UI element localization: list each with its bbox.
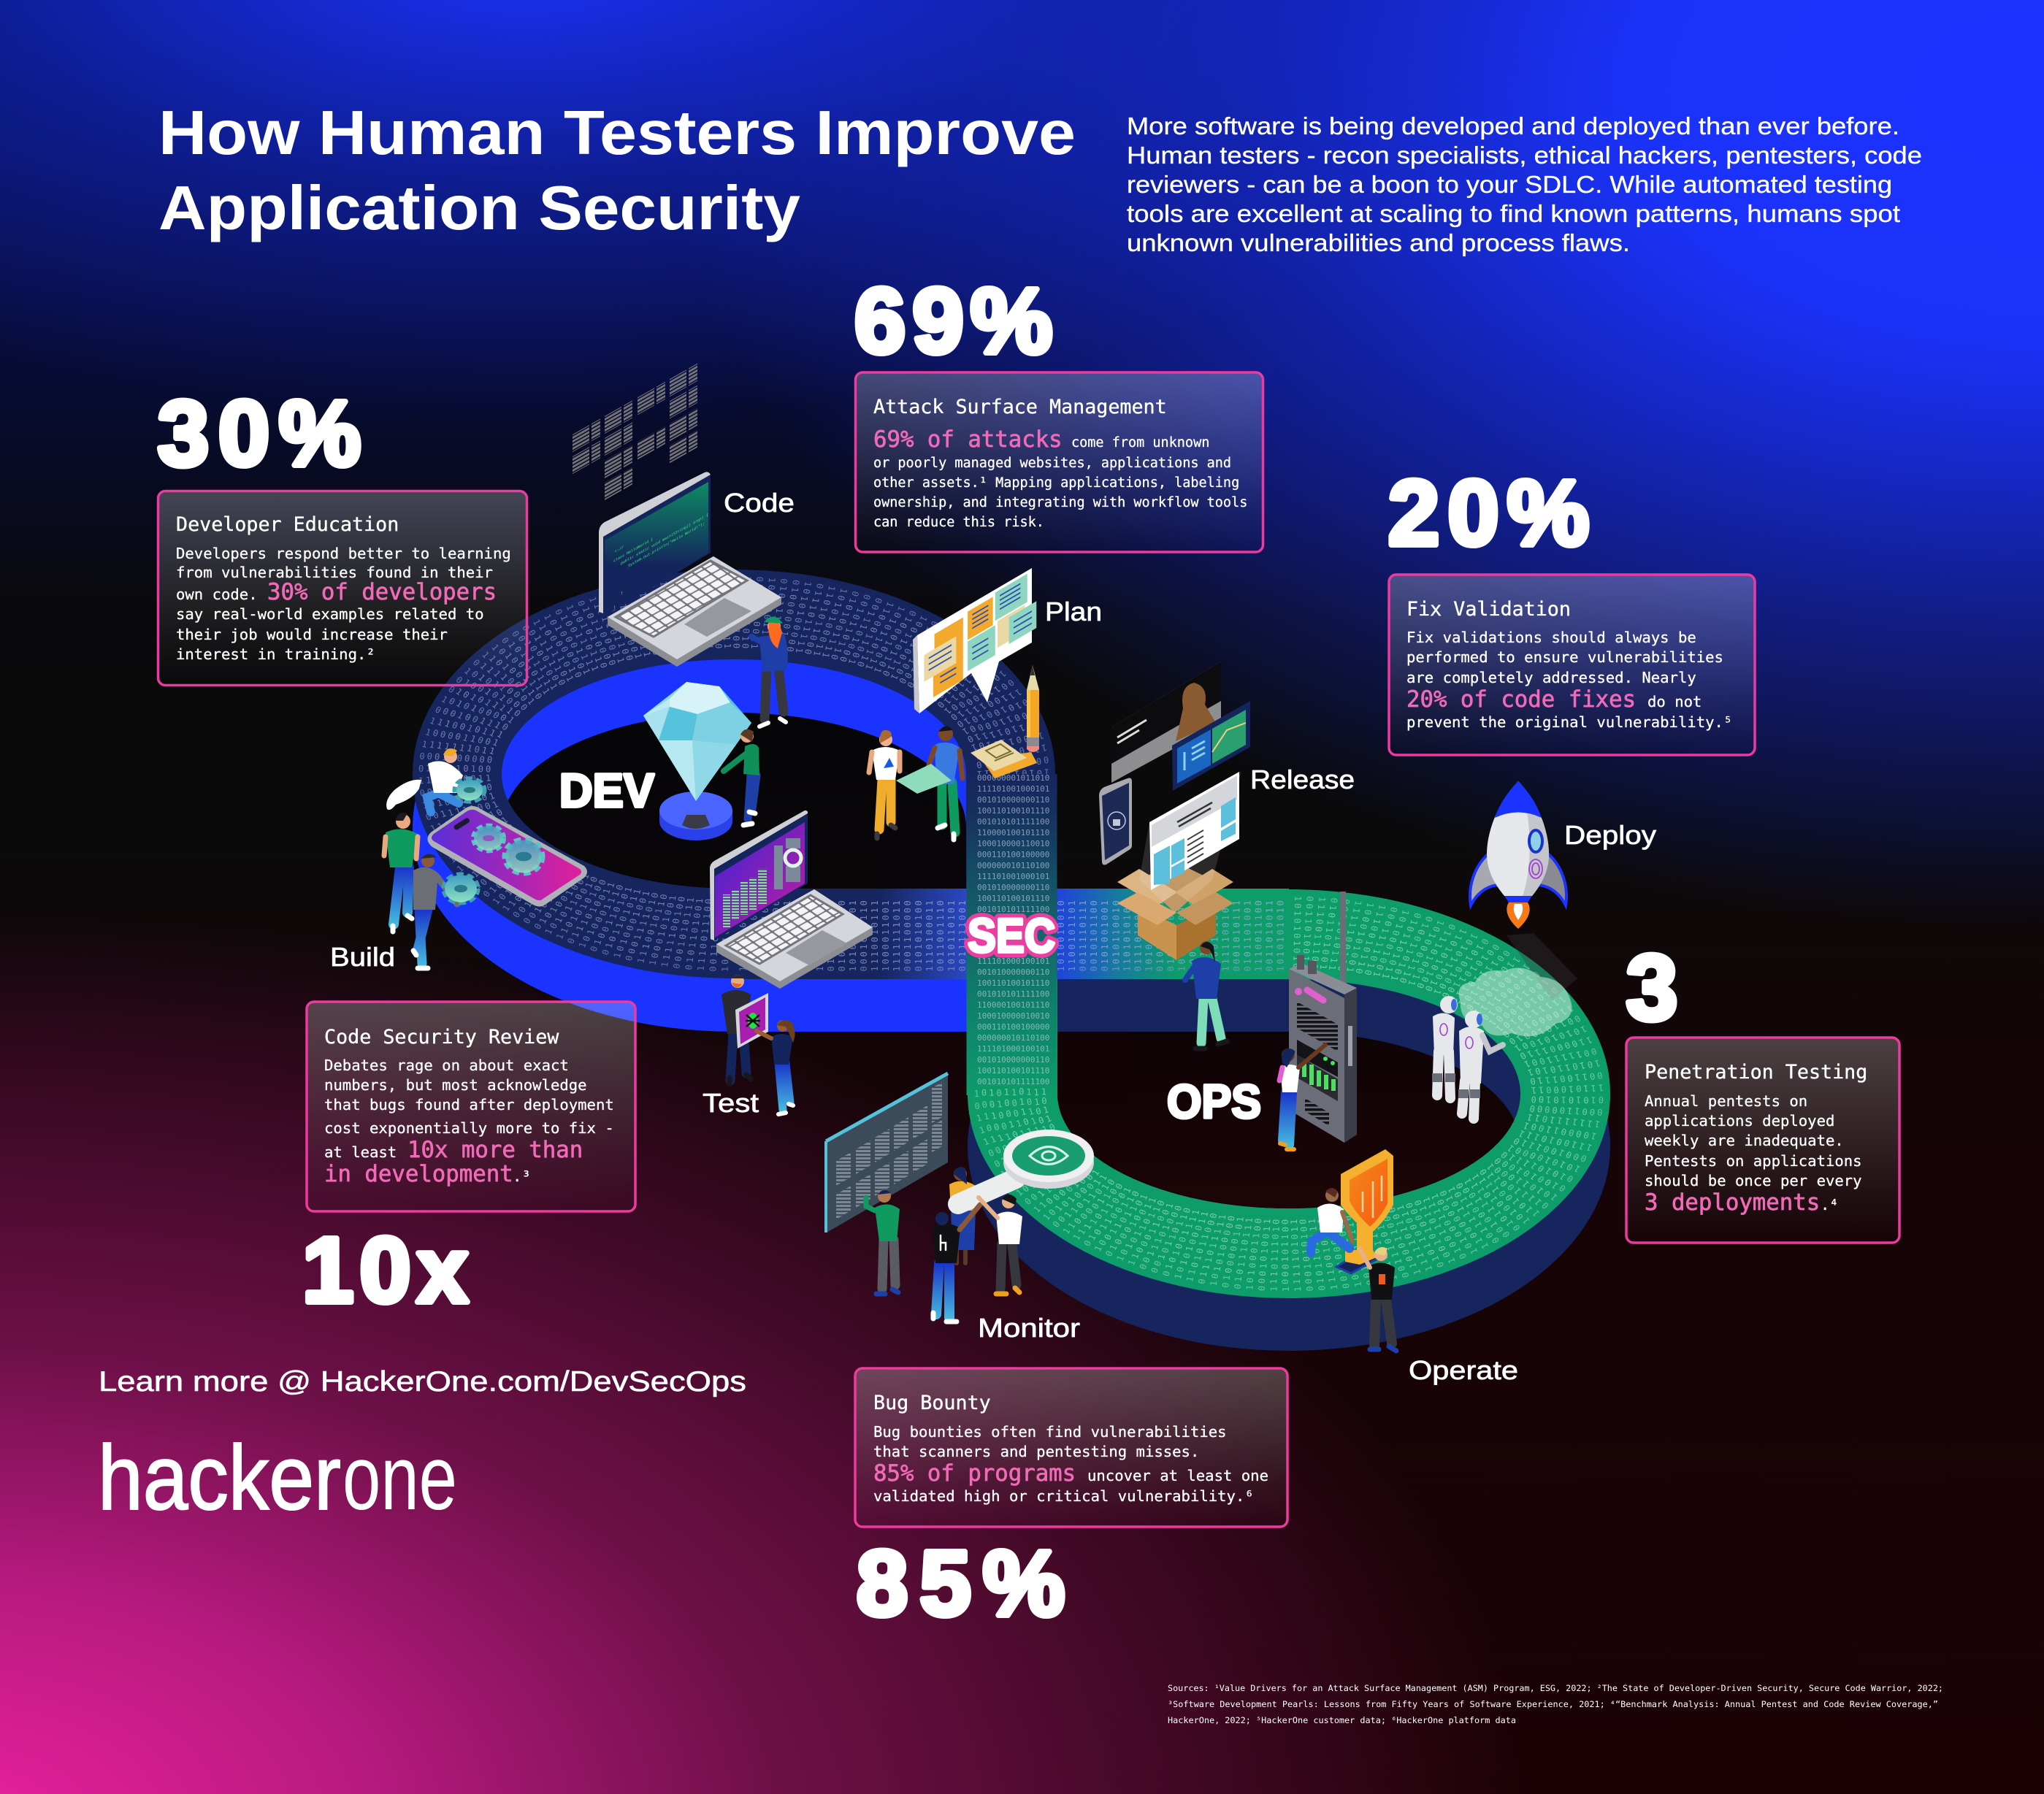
panel: developer education: 30% of developers bbox=[267, 580, 497, 605]
stat: 3: 3 bbox=[1626, 936, 1677, 1039]
figure-eight DevSecOps loop: 11100101010011010110100010110111100101010011010110 bbox=[838, 952, 1284, 957]
panel: penetration testing bbox=[1626, 1038, 1899, 1243]
figure-eight DevSecOps loop: 001010000000110 bbox=[977, 883, 1049, 892]
panel: developer education: Developer Education bbox=[176, 513, 399, 536]
icon: plan board bbox=[913, 568, 1036, 713]
label: Build: Build bbox=[330, 942, 395, 972]
icon: code laptop: class HelloWorld { bbox=[613, 537, 653, 564]
icon: phone with gears bbox=[427, 806, 587, 907]
panel: bug bounty: 85% of programs bbox=[873, 1461, 1076, 1487]
logo: hackerone: one bbox=[342, 1427, 457, 1529]
title bbox=[158, 99, 1076, 243]
figure-eight DevSecOps loop: 0110100110010111001010011010011001011100101001101001100101110010100110100110010111001010011010011001 bbox=[457, 615, 1010, 935]
intro paragraph: unknown vulnerabilities and process flaws. bbox=[1127, 229, 1630, 256]
icon: rocket bbox=[1470, 781, 1577, 1000]
panel: code security review: that bugs found after deployment bbox=[324, 1096, 614, 1113]
sources footnote bbox=[1168, 1683, 1943, 1725]
panel: code security review: in development bbox=[324, 1162, 513, 1187]
person: coder with green cap bbox=[751, 616, 788, 727]
logo: hackerone: hacker bbox=[98, 1427, 341, 1529]
person: operator at server bbox=[1279, 1045, 1325, 1149]
figure-eight DevSecOps loop: 1100100110101101001011100110100110010110100111001011010010110011010110100101110011010011001011010011 bbox=[479, 636, 989, 911]
person: astronaut two bbox=[1459, 1011, 1503, 1119]
icon: test laptop bbox=[710, 810, 873, 989]
panel: penetration testing: .⁴ bbox=[1821, 1196, 1839, 1214]
panel: bug bounty: that scanners and pentesting misses. bbox=[873, 1443, 1199, 1460]
figure-eight DevSecOps loop: 001010101111100 bbox=[977, 817, 1049, 827]
figure-eight DevSecOps loop: 0010110100011010011101001100101101000110100111010011001011010001101001110100110010110100011010011101 bbox=[1026, 948, 1552, 1240]
figure-eight DevSecOps loop: 1010011101001011000110101101101010011101001011000110101101101010011101001011000110101101101010011101 bbox=[419, 577, 1049, 971]
panel: fix validation: Fix Validation bbox=[1406, 598, 1571, 621]
icon: code laptop: } bbox=[621, 591, 623, 596]
icon: exhaust cloud bbox=[1459, 968, 1572, 1036]
icon: release video panel bbox=[1111, 662, 1221, 783]
figure-eight DevSecOps loop: 100110100101110 bbox=[977, 1066, 1049, 1076]
person: builder in grey hoodie bbox=[413, 854, 457, 968]
person: engineer at gem bbox=[724, 729, 759, 825]
panel: penetration testing: 3 deployments bbox=[1645, 1190, 1820, 1216]
figure-eight DevSecOps loop: 000000001011010 bbox=[977, 773, 1049, 783]
figure-eight DevSecOps loop: 0101110010100110101000111010010101110010100110101000111010010101110010100110101000111010010101110010 bbox=[996, 918, 1582, 1270]
person: astronaut one bbox=[1433, 996, 1458, 1098]
figure-eight DevSecOps loop: 100010000110010 bbox=[977, 839, 1049, 848]
panel: developer education: interest in training.² bbox=[176, 645, 375, 663]
figure-eight DevSecOps loop: 0010110100011010011101001100101101000110100111010011001011010001101001110100110010110100011010011101 bbox=[472, 629, 990, 919]
figure-eight DevSecOps loop: 01011100101001101010001110100101011100101001101010 bbox=[850, 945, 1284, 949]
panel: bug bounty: validated high or critical vulnerability.⁶ bbox=[873, 1487, 1254, 1505]
panel: fix validation: 20% of code fixes bbox=[1406, 687, 1636, 713]
label: Test: Test bbox=[703, 1088, 759, 1118]
title: How Human Testers Improve bbox=[158, 99, 1076, 168]
icon: open cardboard box bbox=[1117, 862, 1233, 960]
person: tester with beard bbox=[721, 975, 751, 1084]
person: builder kneeling bbox=[427, 748, 463, 812]
panel: fix validation: prevent the original vulnerability.⁵ bbox=[1406, 713, 1732, 731]
panel: attack surface management: can reduce this risk. bbox=[873, 515, 1044, 530]
panel: attack surface management: or poorly managed websites, applications and bbox=[873, 456, 1231, 471]
figure-eight DevSecOps loop: 11001001101011010010111001101001100101101001110010 bbox=[762, 908, 1284, 913]
panel: code security review: numbers, but most acknowledge bbox=[324, 1076, 587, 1094]
panel: fix validation bbox=[1389, 575, 1755, 755]
figure-eight DevSecOps loop: 100110100101110 bbox=[977, 806, 1049, 816]
figure-eight DevSecOps loop: 00101101000110100111010011001011010001101001110100 bbox=[751, 916, 1284, 920]
figure-eight DevSecOps loop: 1010011101001011000110101101101010011101001011000110101101101010011101001011000110101101101010011101 bbox=[974, 896, 1604, 1292]
sources footnote: HackerOne, 2022; ⁵HackerOne customer data; ⁶HackerOne platform data bbox=[1168, 1715, 1516, 1725]
stat: 20%: 20% bbox=[1388, 461, 1589, 564]
person: monitor analyst in white shirt bbox=[979, 1195, 1022, 1294]
panel: penetration testing: Pentests on applications bbox=[1645, 1152, 1862, 1170]
figure-eight DevSecOps loop: 100110100101110 bbox=[977, 978, 1049, 988]
figure-eight DevSecOps loop: 001010101111100 bbox=[977, 989, 1049, 999]
icon: code laptop: public static void main(String[] args) { bbox=[621, 513, 708, 566]
figure-eight DevSecOps loop: 0101101001110100101101011001011010011101001011010110010110100111010010110101100101101001110100101101 bbox=[486, 644, 981, 904]
icon: gear carried bbox=[445, 875, 477, 902]
figure-eight DevSecOps loop: 1110010101001101011010001011011110010101001101011010001011011110010101001101011010001011011110010101 bbox=[989, 911, 1589, 1277]
icon: website panel bbox=[1149, 772, 1239, 890]
figure-eight DevSecOps loop: 1011001011101000110101100101110100011010110010111010001101011001011101000110101100101110100011010110 bbox=[1019, 940, 1559, 1247]
floating code blocks bbox=[573, 364, 697, 518]
figure-eight DevSecOps loop: 1100100110101101001011100110100110010110100111001011010010110011010110100101110011010011001011010011 bbox=[1033, 956, 1545, 1232]
panel: attack surface management: come from unknown bbox=[1071, 435, 1209, 451]
stat: 85%: 85% bbox=[857, 1532, 1065, 1635]
heading: DEV: DEV bbox=[559, 764, 654, 817]
figure-eight DevSecOps loop: 110000100101110 bbox=[977, 1000, 1049, 1010]
panel: attack surface management bbox=[856, 372, 1263, 552]
figure-eight DevSecOps loop: 0011010100110110100101011100100011010100110110100101011100100011010100110110100101011100100011010100 bbox=[981, 903, 1596, 1284]
icon: server rack with antenna bbox=[1289, 892, 1357, 1143]
person: planner in blue shirt bbox=[926, 726, 962, 840]
person: tester with ponytail bbox=[757, 1020, 795, 1114]
panel: penetration testing: weekly are inadequate. bbox=[1645, 1132, 1844, 1149]
label: Monitor: Monitor bbox=[978, 1313, 1080, 1343]
person: monitor analyst in green bbox=[866, 1189, 900, 1294]
icon: shared plan sheet bbox=[896, 764, 952, 794]
icon: key shield bbox=[1336, 1149, 1393, 1273]
panel: bug bounty: Bug bounties often find vulnerabilities bbox=[873, 1423, 1227, 1441]
panel: code security review: .³ bbox=[513, 1168, 531, 1185]
figure-eight DevSecOps loop: 1110010101001101011010001011011110010101001101011010001011011110010101001101011010001011011110010101 bbox=[435, 594, 1034, 957]
panel: code security review: 10x more than bbox=[407, 1138, 583, 1163]
panel: attack surface management: 69% of attacks bbox=[873, 427, 1063, 453]
icon: monitoring board bbox=[826, 1073, 948, 1233]
figure-eight DevSecOps loop: 001010101111100 bbox=[977, 1077, 1049, 1086]
figure-eight DevSecOps loop: 001010101111100 bbox=[977, 905, 1049, 914]
person: builder in green shirt bbox=[384, 813, 418, 932]
panel: code security review: at least bbox=[324, 1143, 397, 1161]
heading: SEC: SEC bbox=[968, 908, 1055, 962]
label: Plan: Plan bbox=[1045, 597, 1102, 626]
figure-eight DevSecOps loop: 000000010110100 bbox=[977, 861, 1049, 870]
panel: fix validation: are completely addressed. Nearly bbox=[1406, 669, 1696, 686]
stat: 10x: 10x bbox=[302, 1219, 468, 1322]
figure-eight DevSecOps loop: 10100111010010110001101011011010100111010010110001 bbox=[739, 967, 1284, 971]
person: monitor analyst in black h tee bbox=[933, 1205, 980, 1322]
figure-eight DevSecOps loop bbox=[413, 570, 1610, 1351]
label: Deploy: Deploy bbox=[1564, 820, 1656, 850]
panel: code security review: cost exponentially more to fix - bbox=[324, 1119, 614, 1137]
label: Operate: Operate bbox=[1409, 1355, 1518, 1385]
icon: phone with lock bbox=[1099, 778, 1132, 865]
figure-eight DevSecOps loop: 10110010111010001101011001011101000110101100101110 bbox=[739, 923, 1284, 927]
icon: pencil bbox=[1027, 665, 1039, 752]
figure-eight DevSecOps loop: 1011001011101000110101100101110100011010110010111010001101011001011101000110101100101110100011010110 bbox=[464, 622, 998, 926]
figure-eight DevSecOps loop: 1001011010110001011100101001011010110001011100101001011010110001011100101001011010110001011100101001 bbox=[1003, 926, 1574, 1262]
figure-eight DevSecOps loop: 0101110010100110101000111010010101110010100110101000111010010101110010100110101000111010010101110010 bbox=[443, 602, 1027, 948]
person: operator in black tee bbox=[1360, 1247, 1396, 1351]
figure-eight DevSecOps loop: 111101001000101 bbox=[977, 784, 1049, 794]
icon: bug tablet bbox=[735, 993, 768, 1049]
panel: developer education bbox=[158, 491, 527, 685]
panel: fix validation: do not bbox=[1647, 693, 1702, 710]
panel: developer education: Developers respond better to learning bbox=[176, 545, 511, 562]
sources footnote: ³Software Development Pearls: Lessons from Fifty Years of Software Experience, 2021; ⁴“Benchmark Analysis: Annual Pentest and Code Review Coverage,” bbox=[1168, 1699, 1938, 1709]
panel: code security review bbox=[307, 1002, 635, 1211]
figure-eight DevSecOps loop: 100110100101110 bbox=[977, 894, 1049, 903]
figure-eight DevSecOps loop: 0101101001110100101101011001011010011101001011010110010110100111010010110101100101101001110100101101 bbox=[1042, 964, 1536, 1224]
panel: fix validation: performed to ensure vulnerabilities bbox=[1406, 648, 1723, 666]
icon: map tablet bbox=[1172, 701, 1250, 791]
panel: penetration testing: should be once per every bbox=[1645, 1172, 1862, 1189]
person: release manager in hoodie bbox=[1185, 941, 1227, 1049]
intro paragraph: tools are excellent at scaling to find known patterns, humans spot bbox=[1127, 200, 1900, 227]
icon: sketch papers bbox=[971, 740, 1037, 778]
panel: fix validation: Fix validations should always be bbox=[1406, 629, 1696, 646]
figure-eight DevSecOps loop: 100010000010010 bbox=[977, 1011, 1049, 1021]
panel: bug bounty: Bug Bounty bbox=[873, 1392, 991, 1414]
panel: bug bounty: uncover at least one bbox=[1087, 1467, 1268, 1484]
figure-eight DevSecOps loop: 001010000000110 bbox=[977, 1055, 1049, 1065]
intro paragraph: More software is being developed and deployed than ever before. bbox=[1127, 112, 1899, 139]
person: kneeling operator bbox=[1311, 1188, 1352, 1253]
panel: code security review: Debates rage on about exact bbox=[324, 1057, 569, 1074]
icon: gear held by builder bbox=[456, 779, 483, 801]
icon: magnifier tube bbox=[958, 1178, 1016, 1204]
figure-eight DevSecOps loop: 0011010100110110100101011100100011010100110110100101011100100011010100110110100101011100100011010100 bbox=[426, 584, 1041, 964]
icon: release light beam bbox=[1139, 772, 1241, 913]
panel: bug bounty bbox=[855, 1368, 1287, 1527]
panel: penetration testing: Annual pentests on bbox=[1645, 1092, 1807, 1110]
panel: penetration testing: Penetration Testing bbox=[1645, 1061, 1867, 1084]
icon: crystal gem on pedestal bbox=[643, 682, 751, 840]
panel: code security review: Code Security Review bbox=[324, 1026, 559, 1049]
title: Application Security bbox=[158, 174, 800, 243]
sources footnote: Sources: ¹Value Drivers for an Attack Surface Management (ASM) Program, ESG, 2022; ²The State of Developer-Driven Security, Secure Code Warrior, 2022; bbox=[1168, 1683, 1943, 1693]
figure-eight DevSecOps loop: 001010000000110 bbox=[977, 795, 1049, 805]
figure-eight DevSecOps loop: 111101000100101 bbox=[977, 957, 1049, 966]
figure-eight DevSecOps loop: 00110101001101101001010111001000110101001101101001 bbox=[827, 959, 1284, 964]
panel: attack surface management: other assets.¹ Mapping applications, labeling bbox=[873, 475, 1239, 491]
icon: code laptop: c:// bbox=[615, 545, 624, 554]
label: Code: Code bbox=[724, 488, 795, 518]
figure-eight DevSecOps loop: 10010110101100010111001010010110101100010111001010 bbox=[862, 938, 1284, 942]
stat: 69%: 69% bbox=[854, 269, 1052, 372]
panel: developer education: from vulnerabilities found in their bbox=[176, 564, 493, 581]
figure-eight DevSecOps loop: 001010000000110 bbox=[977, 967, 1049, 977]
heading: SEC: SEC bbox=[968, 908, 1055, 962]
figure-eight DevSecOps loop: 01011010011101001011010110010110100111010010110101 bbox=[773, 901, 1284, 905]
heading: OPS: OPS bbox=[1167, 1075, 1261, 1128]
icon: speech bubble bbox=[386, 780, 421, 810]
panel: developer education: say real-world examples related to bbox=[176, 605, 484, 623]
figure-eight DevSecOps loop: 000110100100000 bbox=[977, 850, 1049, 859]
intro paragraph: reviewers - can be a boon to your SDLC. While automated testing bbox=[1127, 171, 1892, 198]
label: Release: Release bbox=[1250, 764, 1355, 794]
intro paragraph: Human testers - recon specialists, ethical hackers, pentesters, code bbox=[1127, 142, 1922, 169]
panel: developer education: their job would increase their bbox=[176, 626, 448, 643]
figure-eight DevSecOps loop: 1001011010110001011100101001011010110001011100101001011010110001011100101001011010110001011100101001 bbox=[451, 609, 1019, 942]
icon: code laptop: } bbox=[613, 605, 616, 610]
intro paragraph bbox=[1127, 112, 1922, 256]
panel: attack surface management: ownership, and integrating with workflow tools bbox=[873, 495, 1247, 510]
icon: code laptop bbox=[599, 472, 781, 667]
stat: 30%: 30% bbox=[158, 382, 361, 485]
figure-eight DevSecOps loop: 01101001100101110010100110100110010111001010011010 bbox=[873, 930, 1284, 935]
person: monitor woman in yellow bbox=[949, 1167, 976, 1263]
icon: magnifying glass with eye bbox=[1003, 1130, 1094, 1189]
panel: penetration testing: applications deployed bbox=[1645, 1112, 1834, 1130]
figure-eight DevSecOps loop: 111101001000101 bbox=[977, 872, 1049, 881]
figure-eight DevSecOps loop: 000000010110100 bbox=[977, 1033, 1049, 1043]
icon: code laptop: System.out.println("Hello World!"); bbox=[628, 521, 705, 569]
figure-eight DevSecOps loop: 110000100101110 bbox=[977, 828, 1049, 837]
call to action: Learn more @ HackerOne.com/DevSecOps bbox=[99, 1366, 746, 1398]
person: planner in white tee bbox=[869, 730, 900, 838]
panel: attack surface management: Attack Surface Management bbox=[873, 396, 1167, 418]
figure-eight DevSecOps loop: 111101000100101 bbox=[977, 1044, 1049, 1054]
figure-eight DevSecOps loop: 000110100100000 bbox=[977, 1022, 1049, 1032]
figure-eight DevSecOps loop: 0110100110010111001010011010011001011100101001101001100101110010100110100110010111001010011010011001 bbox=[1011, 933, 1567, 1254]
panel: developer education: own code. bbox=[176, 586, 258, 603]
